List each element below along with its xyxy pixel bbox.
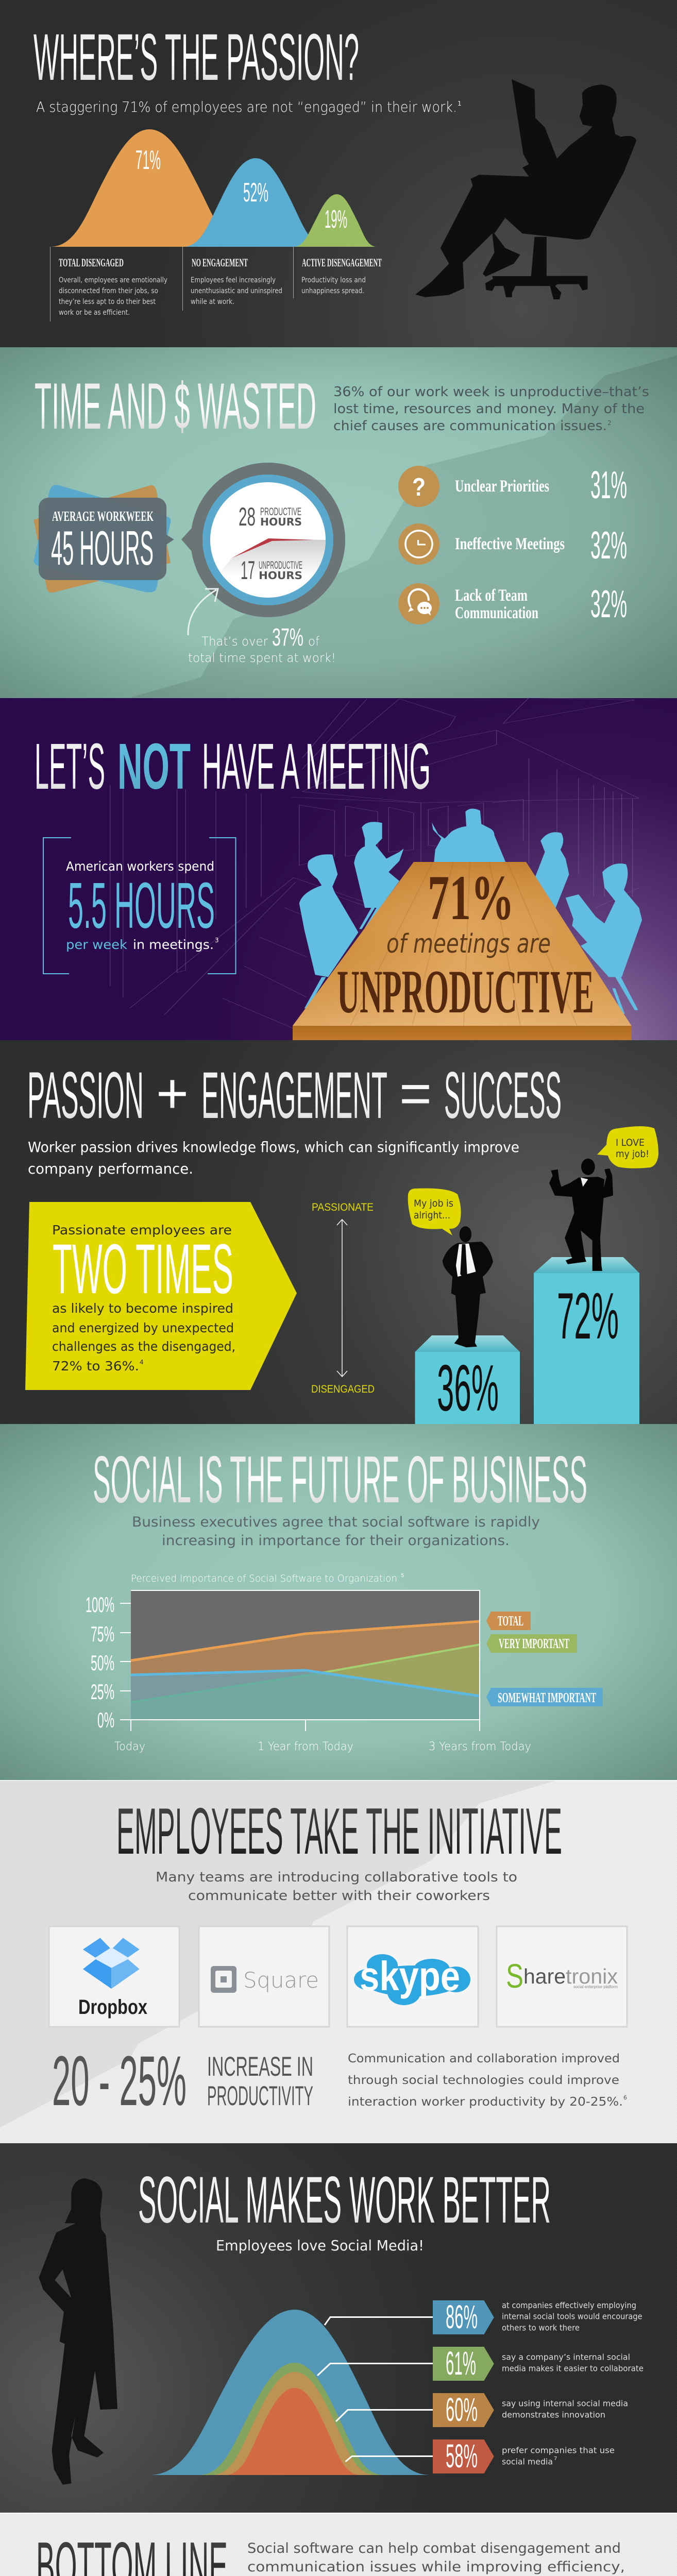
logo card: skype: skype [360,1953,460,1999]
chart: perceived importance area chart: 75% [91,1622,114,1646]
table: wooden meeting table with 71 percent: 71% [428,862,514,933]
logo card: sharetronix: hare [523,1964,566,1988]
callout: two times arrow: as likely to become inspired [52,1301,233,1316]
text block: social software summary: Social software can help combat disengagement and [247,2540,621,2556]
stat: 86 percent: internal social tools would encourage [502,2312,642,2321]
callout: 37 percent of time: That’s over [201,634,268,649]
text block: active disengagement: Productivity loss and [301,276,366,284]
title: passion engagement success: = [399,1062,432,1125]
stat: 58 percent: social media [502,2456,553,2466]
callout: 5.5 hours in meetings: 3 [215,937,219,944]
pedestal: 36 percent: 36% [437,1351,499,1425]
text block: productivity explanation: interaction worker productivity by 20-25%. [348,2095,623,2109]
callout: my job is alright [408,1188,461,1235]
stat: 60 percent [433,2391,628,2428]
logo card: sharetronix: S [506,1957,523,1995]
subheading: employees love social media: Employees love Social Media! [216,2237,424,2254]
text block: productivity explanation: Communication and collaboration improved [348,2052,620,2065]
callout: two times arrow: 4 [140,1359,144,1366]
chart: clock of productive and unproductive hours: HOURS [259,569,302,582]
panel: passion plus engagement equals success [0,1040,677,1425]
list item: lack of team communication: Communication [455,604,538,622]
badge: average workweek [33,485,174,592]
logo card: sharetronix: tronix [566,1964,618,1988]
title: passion engagement success: ENGAGEMENT [201,1059,387,1132]
panel: time and money wasted: 32% [590,523,627,567]
callout: my job is alright: My job is [414,1198,453,1209]
text block: social software summary [247,2540,625,2576]
chart: social media bell curves [149,2310,433,2475]
chart: perceived importance area chart: 0% [97,1708,114,1732]
chart: perceived importance area chart: 100% [86,1592,114,1617]
subheading: worker passion: company performance. [28,1160,193,1177]
subheading: collaborative tools [156,1870,517,1904]
text block: no engagement: while at work. [191,298,234,306]
chart: perceived importance area chart: 3 Years from Today [429,1740,531,1753]
subheading: collaborative tools: communicate better with their coworkers [188,1888,490,1904]
callout: two times arrow: and energized by unexpected [52,1320,234,1335]
icon: meeting attendees silhouettes [299,809,642,1014]
stat: 86 percent: at companies effectively employing [502,2300,636,2310]
stat: 58 percent: 58% [446,2437,478,2475]
chart label: Perceived Importance of Social Software to Organization [131,1573,397,1584]
callout: 37 percent of time: of [308,634,320,649]
chart: clock of productive and unproductive hours [181,463,345,617]
stat: productivity increase: INCREASE IN [207,2052,313,2082]
stat: 60 percent: demonstrates innovation [502,2410,605,2420]
stat: productivity increase: 20 - 25% [52,2042,187,2121]
title: passion engagement success: + [156,1062,189,1125]
text block: total disengaged: disconnected from their jobs, so [59,287,158,295]
chart: perceived importance area chart: 50% [91,1651,114,1675]
stat: 86 percent: 86% [446,2298,478,2335]
list item: ineffective meetings: Ineffective Meetings [455,535,565,553]
chart: engagement bell curves: 71% [136,145,161,175]
arrow: passionate to disengaged scale: PASSIONATE [312,1201,374,1213]
text block: unproductive week: lost time, resources and money. Many of the [333,401,645,417]
logo card: sharetronix: social enterprise platform [573,1985,618,1989]
text block: productivity explanation: 6 [623,2094,627,2101]
callout: I love my job: my job! [616,1148,649,1160]
chart: clock of productive and unproductive hours: PRODUCTIVE [260,506,301,518]
stat: 61 percent [433,2345,644,2382]
text block: productivity explanation: through social technologies could improve [348,2074,619,2087]
pedestal: 72 percent [534,1257,639,1424]
legend: somewhat important [486,1688,603,1706]
panel: let's not have a meeting [0,698,677,1041]
text block: total disengaged: work or be as efficient. [59,309,130,317]
panel: time and money wasted [0,347,677,698]
text block: active disengagement: unhappiness spread. [301,287,364,295]
arrow: curved arrow to clock [188,589,218,635]
subheading: worker passion: Worker passion drives knowledge flows, which can significantly improve [28,1139,519,1156]
title: let's not have a meeting [35,730,431,803]
pedestal: 36 percent [415,1335,520,1425]
text block: social software summary: communication issues while improving efficiency, [247,2559,625,2575]
text block: unproductive week: chief causes are communication issues. [333,418,607,434]
stat: 58 percent [433,2437,615,2475]
chart label: 5 [401,1573,404,1579]
chart: perceived importance area chart: 1 Year from Today [258,1740,353,1753]
callout: 5.5 hours in meetings: per week [66,937,128,952]
chart: perceived importance area chart [86,1590,531,1753]
chart: perceived importance area chart: Today [114,1740,145,1753]
chart: perceived importance area chart: 25% [91,1680,114,1704]
callout: 37 percent of time: total time spent at work! [188,651,336,665]
logo card: skype [347,1926,478,2027]
callout: 37 percent of time: 37% [272,624,303,651]
callout: 5.5 hours in meetings: American workers spend [66,859,214,874]
subheading: 71 percent: A staggering 71% of employees are not “engaged” in their work. [36,98,457,115]
logo card: square: Square [243,1968,319,1993]
callout: my job is alright: alright... [414,1210,450,1221]
list item: lack of team communication: Lack of Team [455,586,528,605]
text block: total disengaged: Overall, employees are emotionally [59,276,167,284]
stat: 61 percent: media makes it easier to collaborate [502,2364,644,2374]
arrow: passionate to disengaged scale [311,1201,375,1395]
text block: productivity explanation [348,2052,627,2109]
text block: no engagement: Employees feel increasingly [191,276,276,284]
title: passion engagement success [27,1059,562,1132]
text block: unproductive week: 2 [607,419,612,427]
panel: where's the passion [0,0,677,347]
arrow: passionate to disengaged scale: DISENGAGED [311,1383,375,1395]
title: let's not have a meeting: LET’S [35,730,105,803]
text block: total disengaged: TOTAL DISENGAGED [59,256,124,269]
panel: time and money wasted: TIME AND $ WASTED [35,369,316,443]
callout: two times arrow: TWO TIMES [53,1230,233,1309]
list item: unclear priorities [398,463,627,507]
legend: very important: VERY IMPORTANT [499,1636,569,1651]
title: let's not have a meeting: NOT [117,730,191,803]
icon: standing businessman [443,1226,493,1347]
badge: average workweek: AVERAGE WORKWEEK [52,509,154,524]
subheading: business executives [132,1514,540,1549]
stat: 58 percent: 7 [554,2456,557,2462]
chart: clock of productive and unproductive hours: UNPRODUCTIVE [259,560,302,571]
text block: active disengagement [301,256,382,295]
logo card: dropbox: Dropbox [78,1996,147,2019]
callout: two times arrow: challenges as the disengaged, [52,1339,235,1354]
text block: unproductive week: 36% of our work week is unproductive–that’s [333,384,649,400]
panel: time and money wasted: 31% [590,463,627,506]
legend: total [486,1612,531,1630]
stat: productivity increase: PRODUCTIVITY [207,2081,313,2111]
callout: two times arrow [25,1202,297,1390]
logo card: dropbox [49,1926,179,2027]
subheading: business executives: Business executives agree that social software is rapidly [132,1514,540,1530]
callout: I love my job [597,1126,658,1168]
text block: no engagement: NO ENGAGEMENT [192,256,248,269]
panel: time and money wasted: 32% [590,582,627,625]
text block: no engagement [191,256,282,306]
legend: total: TOTAL [498,1613,523,1629]
list item: unclear priorities: ? [412,473,426,501]
stat: 60 percent: 60% [446,2391,478,2428]
logo card: square [199,1926,329,2027]
table: wooden meeting table with 71 percent [293,862,632,1041]
icon: businesswoman silhouette [39,2178,117,2485]
chart: clock of productive and unproductive hours: HOURS [260,516,302,528]
panel: social is the future of business [0,1424,677,1780]
panel: employees take the initiative [0,1780,677,2143]
panel: let's not have a meeting: 5.5 HOURS [68,869,215,942]
text block: total disengaged [59,256,167,317]
list item: ineffective meetings [398,523,627,567]
panel: social makes work better [0,2143,677,2513]
table: wooden meeting table with 71 percent: of meetings are [386,929,551,959]
subheading: worker passion [28,1139,519,1177]
icon: cheering businessman [549,1159,613,1271]
callout: I love my job: I LOVE [616,1137,645,1148]
stat: 61 percent: 61% [446,2345,476,2382]
badge: average workweek: 45 HOURS [51,521,154,575]
text block: active disengagement: ACTIVE DISENGAGEMENT [302,256,382,269]
subheading: collaborative tools: Many teams are introducing collaborative tools to [156,1870,517,1885]
legend: very important [486,1634,577,1653]
legend: somewhat important: SOMEWHAT IMPORTANT [498,1690,596,1705]
subheading: business executives: increasing in importance for their organizations. [162,1533,510,1549]
stat: 60 percent: say using internal social media [502,2399,628,2409]
icon: man in office chair reading [415,79,636,299]
stat: 86 percent [433,2298,642,2335]
panel: bottom line [0,2513,677,2576]
chart: engagement bell curves: 19% [325,206,347,233]
list item: unclear priorities: Unclear Priorities [455,477,549,496]
title: passion engagement success: PASSION [27,1059,144,1132]
callout: two times arrow: 72% to 36%. [52,1359,139,1374]
chart: clock of productive and unproductive hours: 17 [241,556,255,585]
logo card: sharetronix [497,1926,627,2027]
callout: 37 percent of time [188,624,336,665]
stat: 61 percent: say a company’s internal social [502,2352,630,2362]
callout: 5.5 hours in meetings: in meetings. [133,937,214,952]
subheading: 71 percent: 1 [458,100,462,107]
text block: total disengaged: they’re less apt to do their best [59,298,156,306]
text block: no engagement: unenthusiastic and uninspired [191,287,282,295]
chart: engagement bell curves: 52% [243,178,268,208]
list item: lack of team communication [398,582,627,625]
stat: 86 percent: others to work there [502,2323,580,2332]
callout: 5.5 hours in meetings [43,838,236,974]
callout: two times arrow: Passionate employees are [52,1223,232,1238]
text block: unproductive week [333,384,649,434]
stat: 58 percent: prefer companies that use [502,2446,615,2455]
chart: clock of productive and unproductive hours: 28 [239,502,256,531]
chart: engagement bell curves [50,129,377,321]
